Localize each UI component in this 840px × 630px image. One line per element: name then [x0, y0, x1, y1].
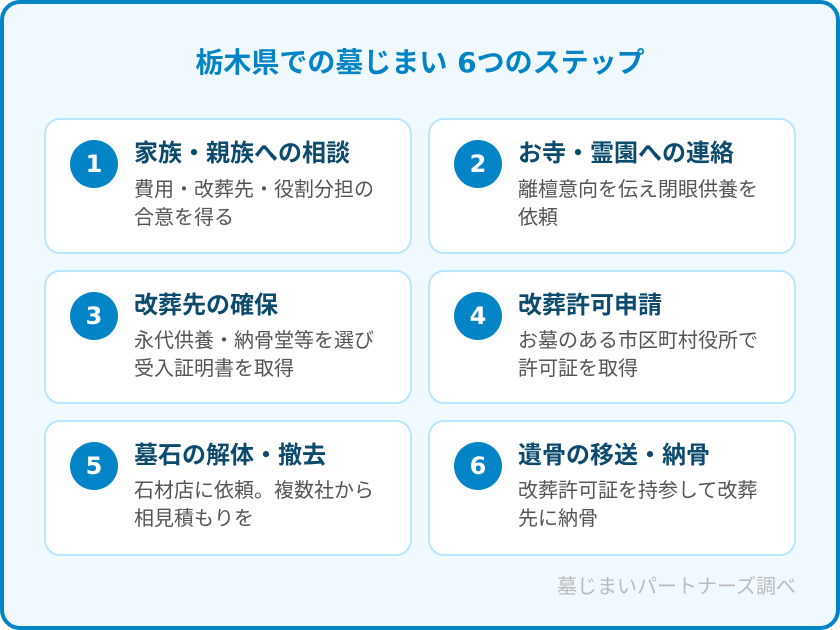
- step 3 text: [134, 328, 374, 380]
- panel: step 2: [428, 118, 796, 254]
- panel: step 3: [44, 270, 412, 404]
- step number 5: 5: [86, 452, 102, 480]
- step number 6: 6: [470, 452, 486, 480]
- step 1 text: [134, 177, 374, 229]
- title: 栃木県での墓じまい 6つのステップ: [195, 46, 645, 79]
- step number 3: 3: [86, 302, 102, 330]
- step 5 heading: 墓石の解体・撤去: [134, 441, 326, 469]
- step 1 heading: 家族・親族への相談: [134, 139, 350, 167]
- panel: step 5: [44, 420, 412, 556]
- source note: 墓じまいパートナーズ調べ: [557, 574, 796, 598]
- step 4 text: 許可証を取得: [518, 356, 638, 380]
- step 3 text: 受入証明書を取得: [134, 356, 294, 380]
- step 2 heading: お寺・霊園への連絡: [518, 139, 734, 167]
- step number 2: [454, 140, 502, 188]
- step number 1: 1: [86, 150, 102, 178]
- step 3 heading: 改葬先の確保: [134, 291, 278, 319]
- step number 1: [70, 140, 118, 188]
- panel: step 4: [428, 270, 796, 404]
- step 6 text: [518, 478, 757, 530]
- step number 3: [70, 292, 118, 340]
- step 2 text: [518, 177, 758, 229]
- step number 4: 4: [470, 302, 486, 330]
- step 1 text: 合意を得る: [134, 205, 234, 229]
- step 3 text: 永代供養・納骨堂等を選び: [134, 328, 374, 352]
- step number 2: 2: [470, 150, 486, 178]
- step 6 text: 改葬許可証を持参して改葬: [518, 478, 757, 502]
- step 1 text: 費用・改葬先・役割分担の: [134, 177, 374, 201]
- step 6 heading: 遺骨の移送・納骨: [518, 441, 710, 469]
- panel: step 6: [428, 420, 796, 556]
- panel: step 1: [44, 118, 412, 254]
- step 5 text: [134, 478, 374, 530]
- step 4 text: お墓のある市区町村役所で: [518, 328, 758, 352]
- step 2 text: 依頼: [518, 205, 558, 229]
- step 5 text: 石材店に依頼。複数社から: [134, 478, 374, 502]
- step 4 text: [518, 328, 758, 380]
- step number 4: [454, 292, 502, 340]
- step 4 heading: 改葬許可申請: [518, 291, 662, 319]
- step 5 text: 相見積もりを: [134, 506, 254, 530]
- step 2 text: 離檀意向を伝え閉眼供養を: [518, 177, 758, 201]
- step 6 text: 先に納骨: [518, 506, 598, 530]
- step number 5: [70, 442, 118, 490]
- step number 6: [454, 442, 502, 490]
